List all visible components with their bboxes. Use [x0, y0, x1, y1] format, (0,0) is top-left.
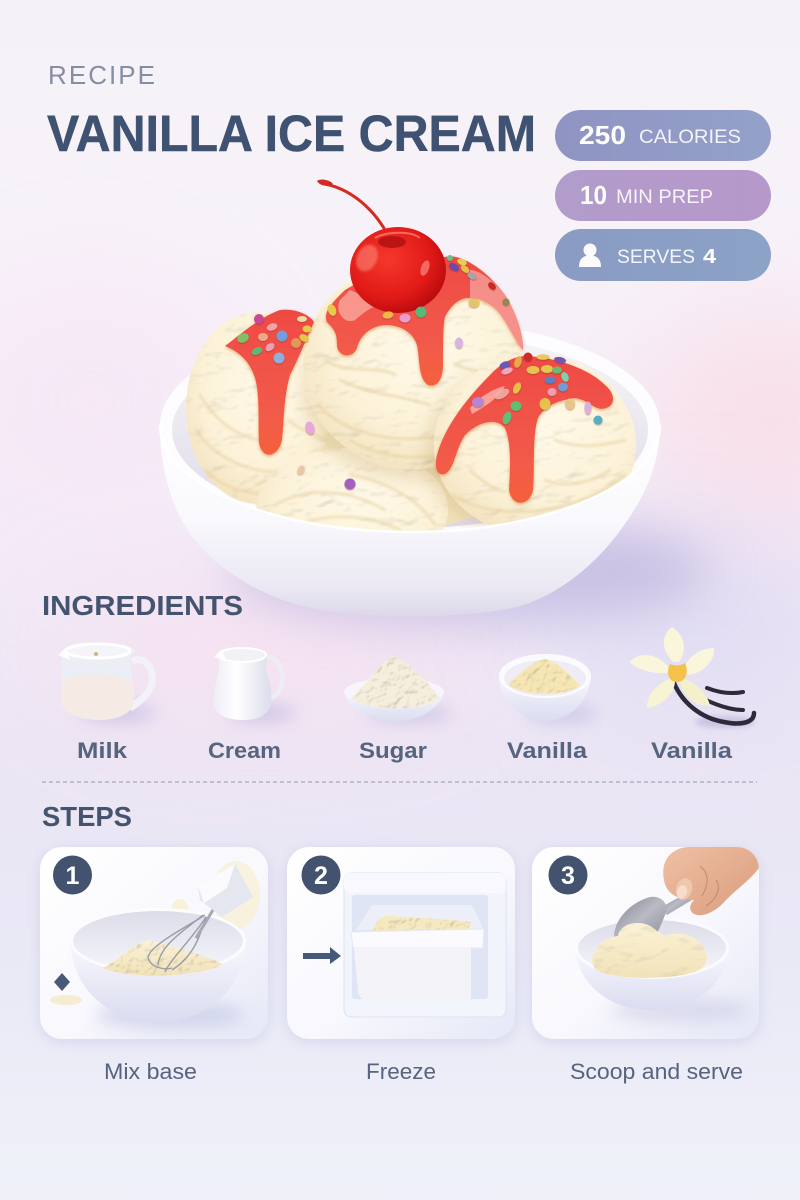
step badge: 3: 3: [561, 862, 575, 890]
stat pill: prep time: [555, 170, 771, 221]
icon: vanilla bowl: [499, 654, 598, 722]
ingredient: vanilla powder: [499, 654, 598, 763]
icon: person: [579, 244, 601, 267]
label: sugar: Sugar: [359, 738, 427, 763]
syrup: top scoop: [326, 256, 523, 386]
ingredient: vanilla flower: [630, 627, 755, 763]
ingredient: sugar: [344, 656, 452, 763]
bowl back: [160, 319, 660, 531]
card: [287, 847, 515, 1039]
step caption: mix base: Mix base: [104, 1059, 197, 1084]
scoop: right: [424, 355, 636, 538]
step badge: 1: [53, 856, 92, 894]
ingredient: cream: [208, 648, 296, 763]
stat pill: calories: CALORIES: [639, 126, 741, 148]
illustration: bowl, spoon and hand: [575, 847, 759, 1022]
cherry: [350, 227, 446, 313]
step 3: scoop and serve: [532, 847, 759, 1084]
label: milk: Milk: [77, 738, 128, 763]
cherry stem: [325, 184, 392, 244]
stat pill: prep time: 10: [580, 180, 607, 210]
scoop: front: [256, 448, 448, 572]
sprinkles: [236, 255, 602, 490]
arrow: [303, 947, 341, 964]
syrup: right scoop: [436, 356, 613, 503]
stat pill: servings: SERVES: [617, 246, 695, 268]
scoop: top: [303, 261, 523, 480]
icon: vanilla flower and pods: [630, 627, 755, 728]
icon: sugar bowl: [344, 656, 452, 722]
stat pill: prep time: MIN PREP: [616, 186, 713, 208]
ingredient: milk: [58, 642, 156, 763]
card: [532, 847, 759, 1039]
stat pill: calories: 250: [579, 120, 626, 150]
step badge: 2: 2: [314, 862, 328, 890]
syrup: left scoop: [225, 310, 314, 455]
step caption: scoop and serve: Scoop and serve: [570, 1059, 743, 1084]
illustration: bowl and whisk: [50, 861, 260, 1029]
card: [40, 847, 268, 1039]
icon: milk jug: [58, 642, 156, 722]
illustration: freezer with container: [344, 873, 506, 1017]
title: VANILLA ICE CREAM: [47, 105, 536, 162]
label: cream: Cream: [208, 738, 281, 763]
label: vanilla flower: Vanilla: [651, 738, 733, 763]
step caption: freeze: Freeze: [366, 1059, 436, 1084]
heading: steps: STEPS: [42, 801, 132, 832]
stat pill: servings: [555, 229, 771, 281]
step badge: 2: [302, 856, 340, 894]
heading: ingredients: INGREDIENTS: [42, 590, 243, 621]
label: vanilla powder: Vanilla: [507, 738, 588, 763]
hero: ice cream bowl: [160, 180, 710, 625]
step 2: freeze: [287, 847, 515, 1084]
stat pill: servings: 4: [703, 245, 717, 268]
icon: cream jug: [214, 648, 296, 722]
recipe label: RECIPE: [48, 60, 155, 90]
step 1: mix base: [40, 847, 268, 1084]
bowl shadow: [230, 515, 710, 625]
step badge: 1: 1: [66, 862, 80, 890]
step badge: 3: [548, 856, 588, 894]
scoop: left: [186, 312, 330, 504]
bowl front: [160, 425, 660, 616]
stat pill: calories: [555, 110, 771, 161]
